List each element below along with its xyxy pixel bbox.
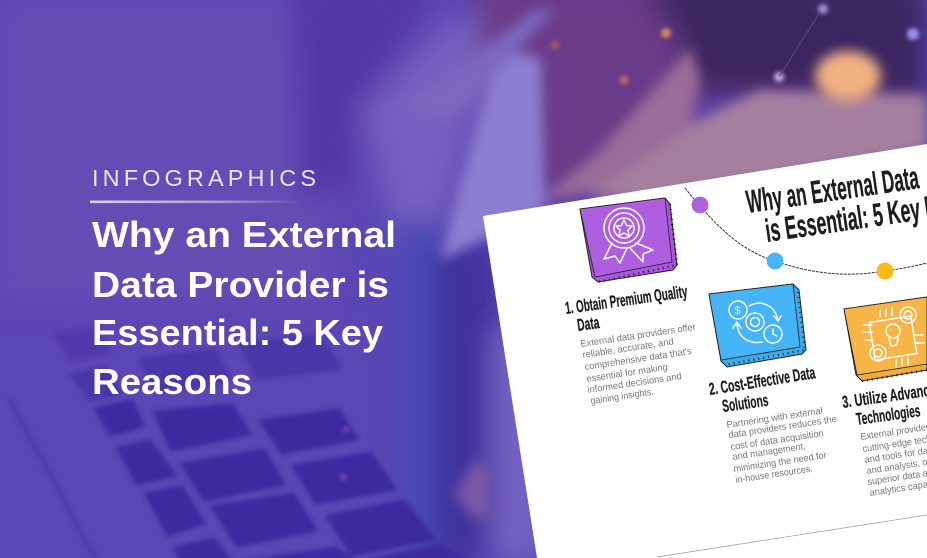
column 1: Obtain Premium Quality Data: Data: [576, 312, 601, 335]
column 2: Cost-Effective Data Solutions: 2. Cost-Effective Data: [707, 362, 817, 399]
column 2: Cost-Effective Data Solutions: Solutions: [721, 390, 770, 416]
main heading: [92, 214, 396, 402]
column 1: Obtain Premium Quality Data: comprehensive data that's: [584, 346, 693, 373]
column 1: Obtain Premium Quality Data: informed decisions and: [587, 371, 682, 396]
column 1: Obtain Premium Quality Data: [564, 281, 697, 407]
column 2: Cost-Effective Data Solutions: Partnering with external: [726, 406, 823, 431]
column 1: Obtain Premium Quality Data: reliable, accurate, and: [582, 336, 674, 361]
column 2: Cost-Effective Data Solutions: and management,: [732, 441, 806, 463]
column 2: Cost-Effective Data Solutions: [707, 362, 837, 486]
divider line at card bottom: [657, 515, 927, 557]
icon panel: yellow advanced technologies: [844, 297, 927, 381]
panel: tilted infographic preview card: [483, 144, 927, 558]
connector dot: blue: [767, 253, 783, 269]
keyboard keys: [55, 328, 470, 558]
main heading: Data Provider is: [92, 264, 389, 305]
dotted connector curve: [685, 188, 927, 274]
column 3: Utilize Advanced Technologies: [841, 378, 927, 499]
column 1: Obtain Premium Quality Data: 1. Obtain Premium Quality: [564, 281, 689, 318]
column 1: Obtain Premium Quality Data: gaining insights.: [590, 387, 654, 407]
column 2: Cost-Effective Data Solutions: data providers reduces the: [728, 414, 837, 441]
main heading: Reasons: [92, 361, 252, 402]
icon panel: purple award: [580, 198, 677, 282]
glowing dots and warm light: [340, 4, 919, 480]
column 1: Obtain Premium Quality Data: essential for making: [586, 362, 668, 385]
rule under eyebrow: [90, 200, 302, 203]
column 2: Cost-Effective Data Solutions: in-house resources.: [735, 464, 813, 486]
column 1: Obtain Premium Quality Data: External data providers offer: [580, 322, 697, 350]
connector dot: purple: [692, 197, 708, 213]
icon panel: blue cost cycle: $: [734, 305, 741, 317]
eyebrow: INFOGRAPHICS: INFOGRAPHICS: [92, 165, 316, 191]
icon panel: blue cost cycle: [709, 284, 806, 367]
connector dot: yellow: [877, 263, 893, 279]
main heading: Why an External: [92, 214, 396, 255]
column 2: Cost-Effective Data Solutions: minimizing the need for: [733, 450, 828, 475]
column 2: Cost-Effective Data Solutions: cost of data acquisition: [730, 428, 824, 453]
main heading: Essential: 5 Key: [92, 312, 383, 353]
